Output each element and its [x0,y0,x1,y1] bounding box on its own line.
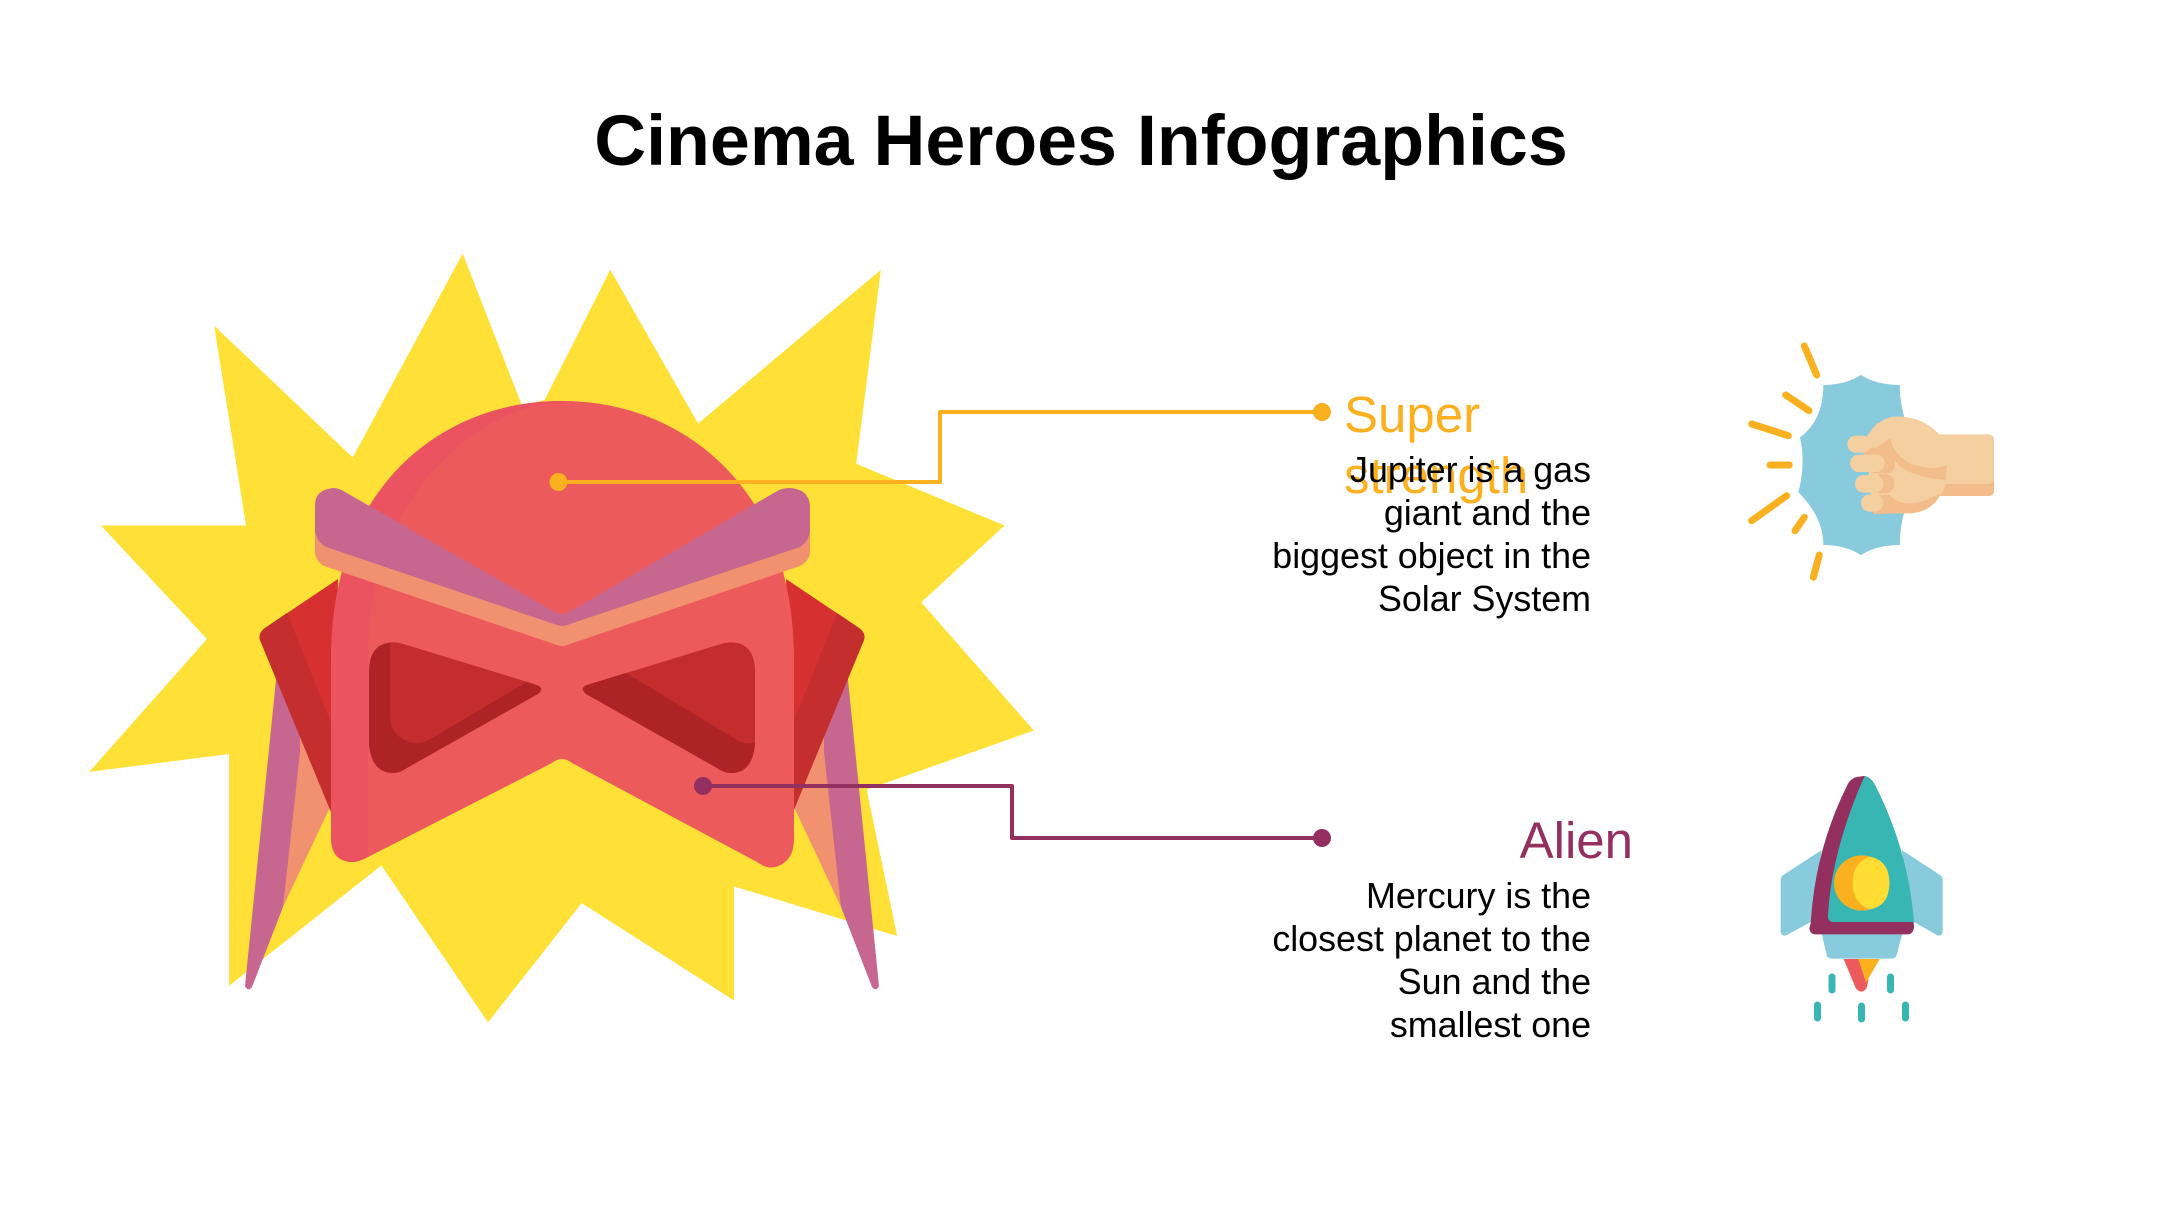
text: mercury description: Sun and the [1398,962,1591,1002]
connector: super strength [550,403,1331,491]
right side strips [793,670,879,989]
rocket body [1809,776,1914,934]
brow band [315,530,810,646]
icon: rocket [1781,776,1943,1019]
left side strips [245,670,331,989]
finger shadows [1863,438,1941,514]
heading: super strength: strength [1344,447,1528,504]
text: mercury description: smallest one [1390,1005,1591,1045]
heading: super strength: Super [1344,386,1480,443]
heading: alien: Alien [1520,812,1633,869]
icon: fist punch [1752,346,1994,577]
blue burst [1798,375,1904,555]
right eye [583,642,755,773]
left eye [369,642,541,773]
illustration: hero mask on starburst [89,254,1034,1022]
right ear guard [786,579,864,812]
helmet left shade [331,401,562,862]
rocket fins [1781,850,1943,936]
title: Cinema Heroes Infographics [594,101,1568,181]
flame [1844,959,1880,992]
thumb crease [1890,438,1947,480]
text: jupiter description: biggest object in the [1272,536,1591,576]
text: jupiter description: Jupiter is a gas [1350,450,1591,490]
text: mercury description: closest planet to the [1272,919,1591,959]
text: jupiter description: giant and the [1384,493,1591,533]
wrist [1933,434,1994,496]
text: jupiter description: Solar System [1378,579,1591,619]
rocket nozzle [1822,933,1902,959]
fingers [1847,420,1893,512]
helmet [331,401,794,868]
palm [1865,417,1946,513]
brow wings [315,488,810,626]
rocket teal panel [1828,776,1914,922]
left ear guard [260,579,338,812]
porthole [1834,855,1889,911]
connector: alien [694,777,1331,847]
text: mercury description: Mercury is the [1366,876,1591,916]
impact rays [1752,346,1819,577]
starburst [89,254,1034,1022]
exhaust dashes [1818,977,1906,1019]
fist [1847,417,1994,514]
